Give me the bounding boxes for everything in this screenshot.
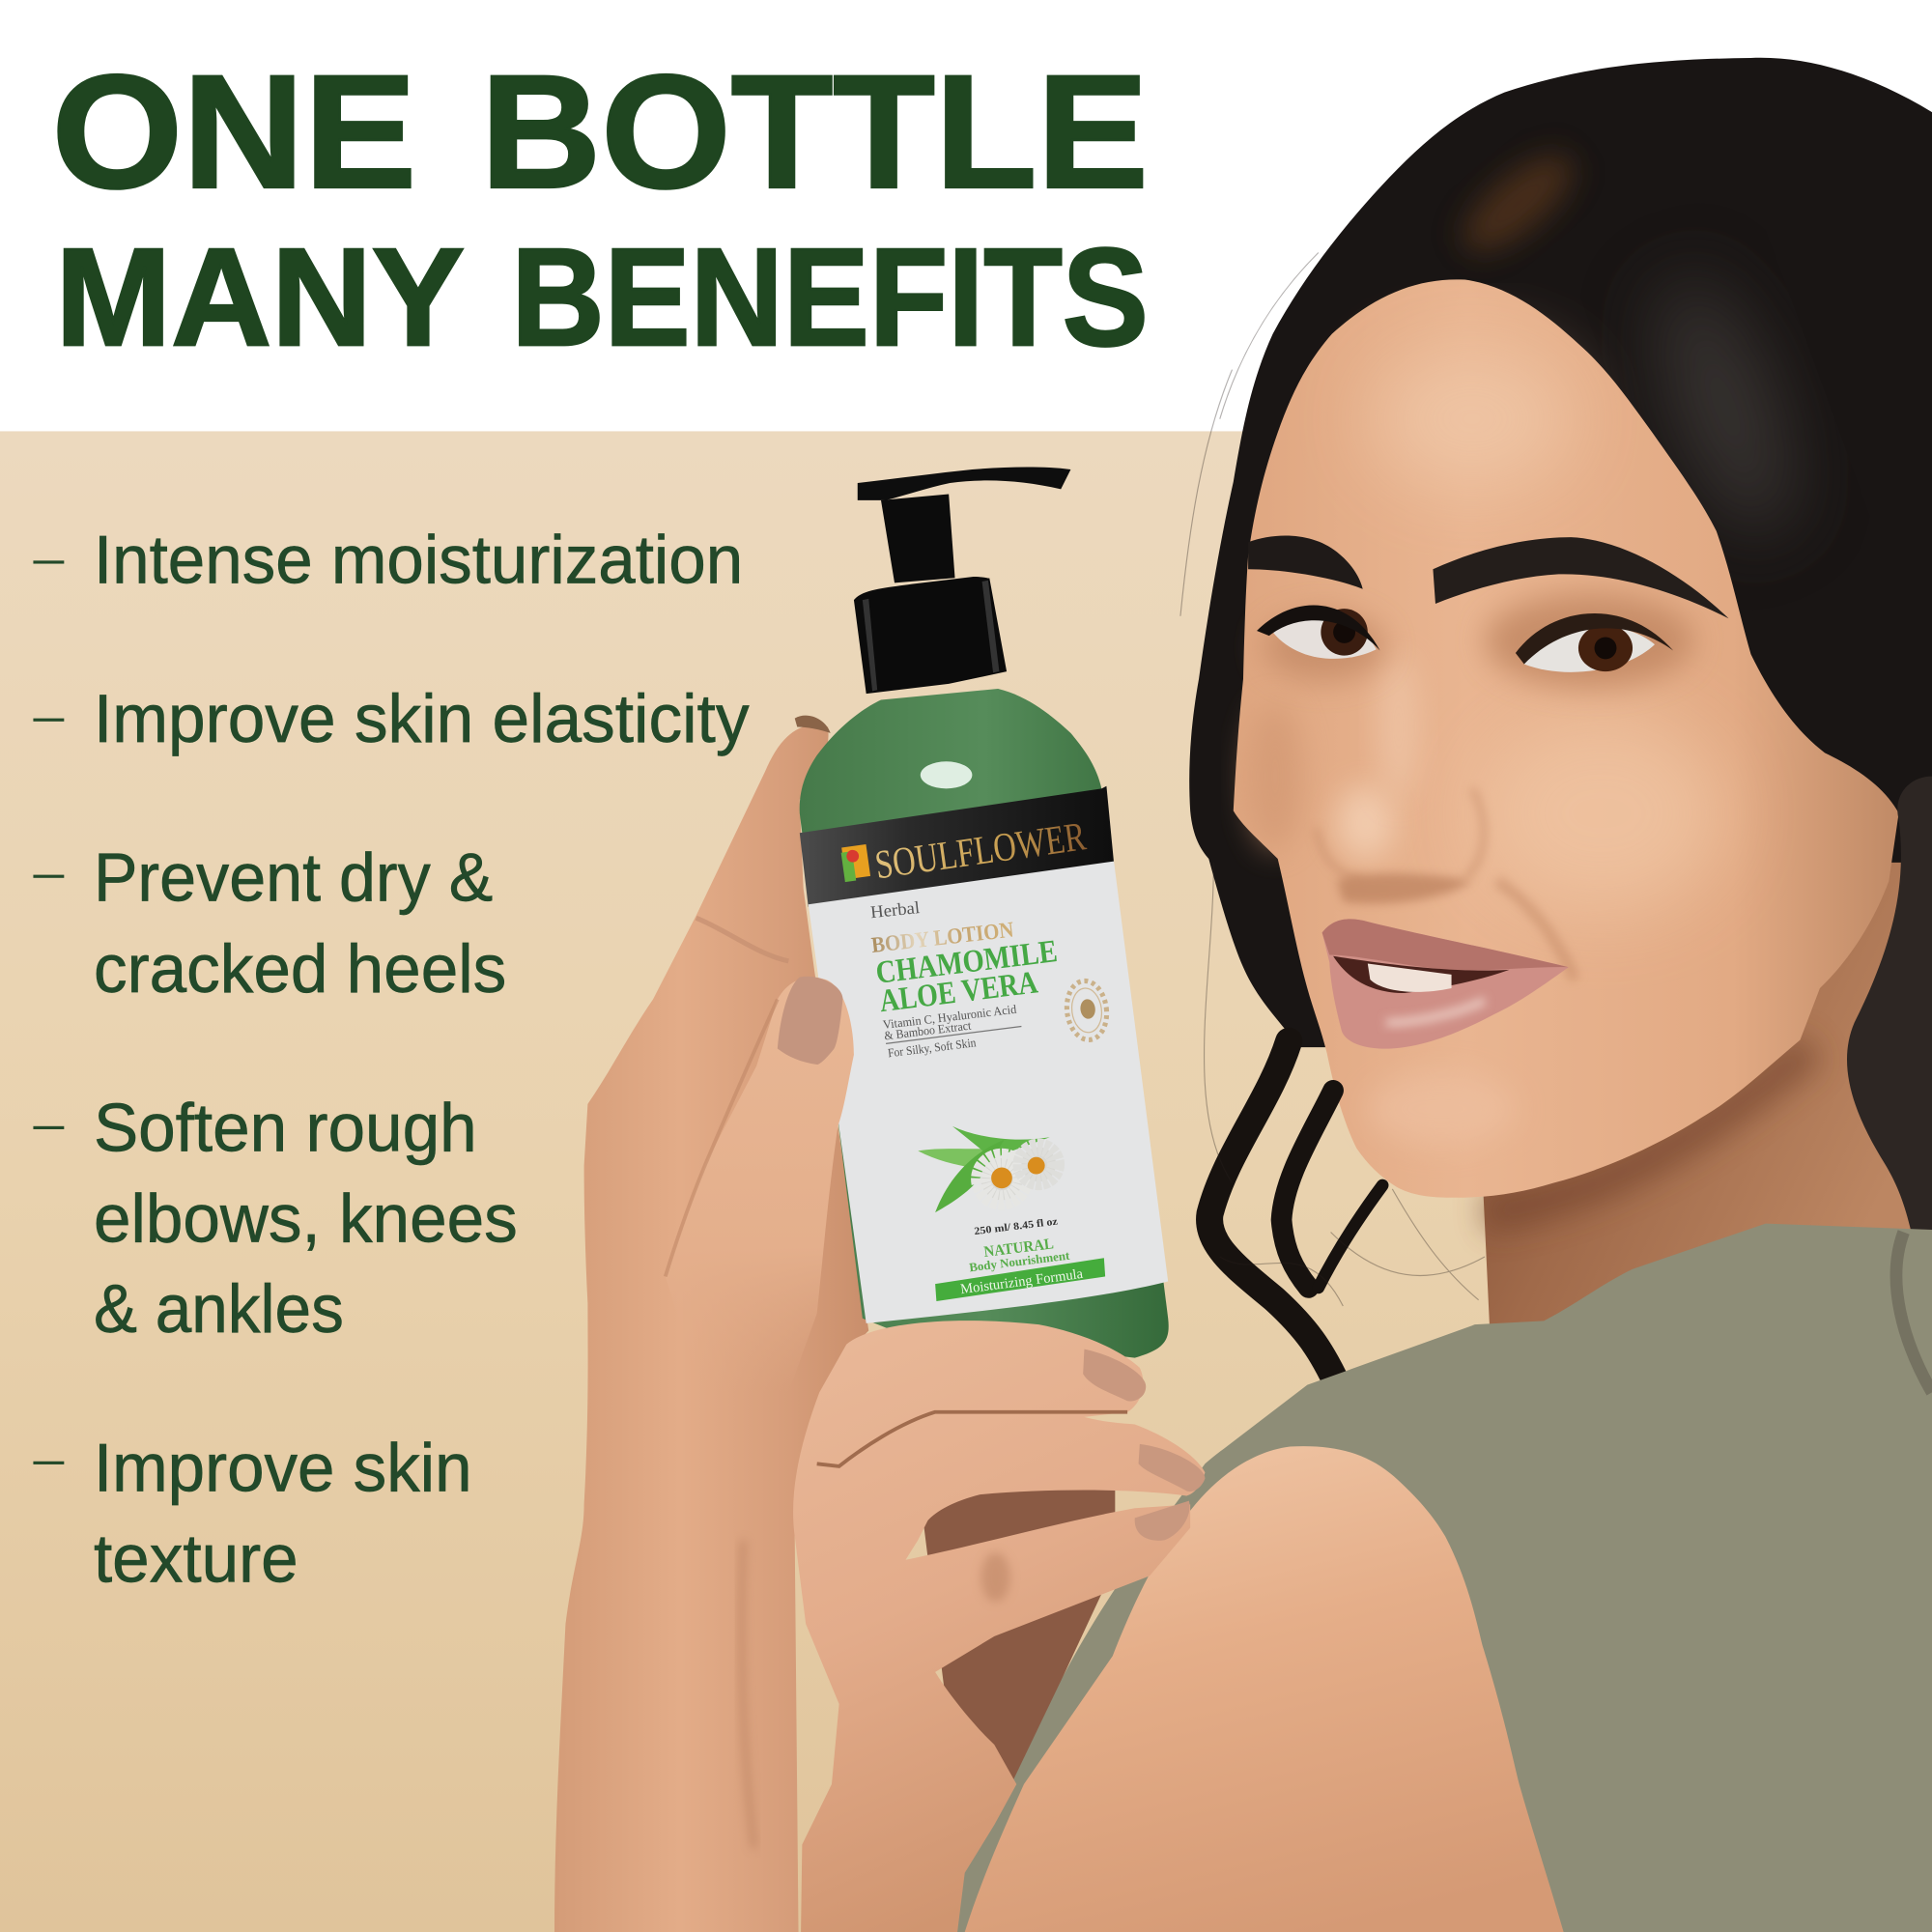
collar sheen	[863, 581, 999, 692]
woman	[936, 58, 1932, 1932]
ingredients: Vitamin C, Hyaluronic Acid	[882, 1003, 1018, 1032]
pump stem	[881, 494, 955, 582]
index fingernail tip	[795, 716, 831, 733]
title	[52, 43, 1149, 375]
formula strip: Moisturizing Formula	[959, 1266, 1084, 1297]
aloe vera: ALOE VERA	[877, 964, 1039, 1019]
benefit: cracked heels: cracked heels	[94, 930, 506, 1007]
white label	[809, 862, 1168, 1323]
body lotion: BODY LOTION	[870, 918, 1015, 957]
bottle body	[800, 689, 1169, 1358]
chest shadow behind fingers	[924, 1485, 1115, 1799]
product bottle	[800, 468, 1169, 1358]
left eye	[1257, 606, 1380, 659]
benefit: intense moisturization: Intense moisturization	[94, 521, 743, 597]
benefit: soften rough elbows: elbows, knees	[94, 1180, 518, 1257]
badge	[1064, 979, 1110, 1042]
face	[1234, 279, 1899, 1198]
finger separation	[817, 1412, 1127, 1466]
pump collar	[854, 577, 1007, 694]
black band	[800, 786, 1114, 907]
thumb crease	[666, 999, 778, 1276]
lower hand with fingers	[793, 1321, 1205, 1932]
benefits list	[33, 521, 750, 1597]
body nourishment: Body Nourishment	[968, 1249, 1071, 1274]
natural: NATURAL	[983, 1236, 1055, 1261]
volume: 250 ml/ 8.45 fl oz	[974, 1216, 1059, 1237]
benefit: skin texture: texture	[94, 1520, 298, 1597]
benefit: skin texture	[33, 1429, 472, 1597]
benefit: soften rough elbows: Soften rough	[94, 1089, 477, 1165]
tagline	[886, 1026, 1021, 1060]
face shading	[1248, 352, 1725, 1146]
nose shadow	[1337, 873, 1472, 903]
top: olive garment	[936, 1224, 1932, 1932]
hair	[1189, 58, 1932, 1047]
thumb	[666, 978, 854, 1392]
title: BOTTLE	[480, 43, 1149, 222]
title: BENEFITS	[511, 219, 1149, 375]
benefit: soften rough elbows: & ankles	[94, 1270, 344, 1347]
tagline: For Silky, Soft Skin	[887, 1036, 978, 1060]
hair part and sheen	[1449, 139, 1818, 551]
ingredients line two: & Bamboo Extract	[883, 1019, 972, 1043]
benefit: cracked heels	[33, 838, 506, 1007]
highlight	[921, 761, 972, 788]
brand name: SOULFLOWER	[872, 813, 1089, 888]
pump head	[858, 468, 1070, 500]
left eyebrow	[1248, 536, 1363, 589]
forearm crease	[742, 1540, 754, 1848]
benefit: cracked heels: Prevent dry &	[94, 838, 493, 915]
right eye	[1516, 613, 1673, 672]
chamomile flower	[1021, 1148, 1056, 1181]
right eyebrow	[1433, 537, 1729, 618]
right side hair	[1847, 777, 1932, 1392]
finger crease	[696, 918, 788, 961]
fingernails	[1083, 1350, 1205, 1541]
thumb nail	[778, 977, 842, 1065]
botanical illustration	[918, 1126, 1056, 1212]
knuckle shade	[980, 1552, 1010, 1602]
shoulder and arm	[965, 1446, 1564, 1932]
benefit: skin elasticity: Improve skin elasticity	[94, 680, 750, 756]
chamomile flower	[980, 1158, 1023, 1200]
title: ONE	[52, 43, 416, 222]
neck	[1482, 863, 1932, 1328]
brand logo	[840, 844, 870, 882]
stray hairs over the top	[1896, 1233, 1932, 1392]
jaw shadow on neck	[1485, 1047, 1811, 1213]
chamomile: CHAMOMILE	[874, 933, 1060, 991]
title: MANY	[55, 219, 465, 375]
herbal: Herbal	[869, 897, 921, 922]
curls	[1209, 1041, 1382, 1386]
lips	[1322, 919, 1569, 1049]
forearm and back hand	[554, 724, 868, 1932]
flyaway hairs	[1180, 252, 1485, 1306]
formula strip	[935, 1258, 1105, 1301]
benefit: skin texture: Improve skin	[94, 1429, 472, 1505]
benefit: soften rough elbows	[33, 1089, 518, 1347]
